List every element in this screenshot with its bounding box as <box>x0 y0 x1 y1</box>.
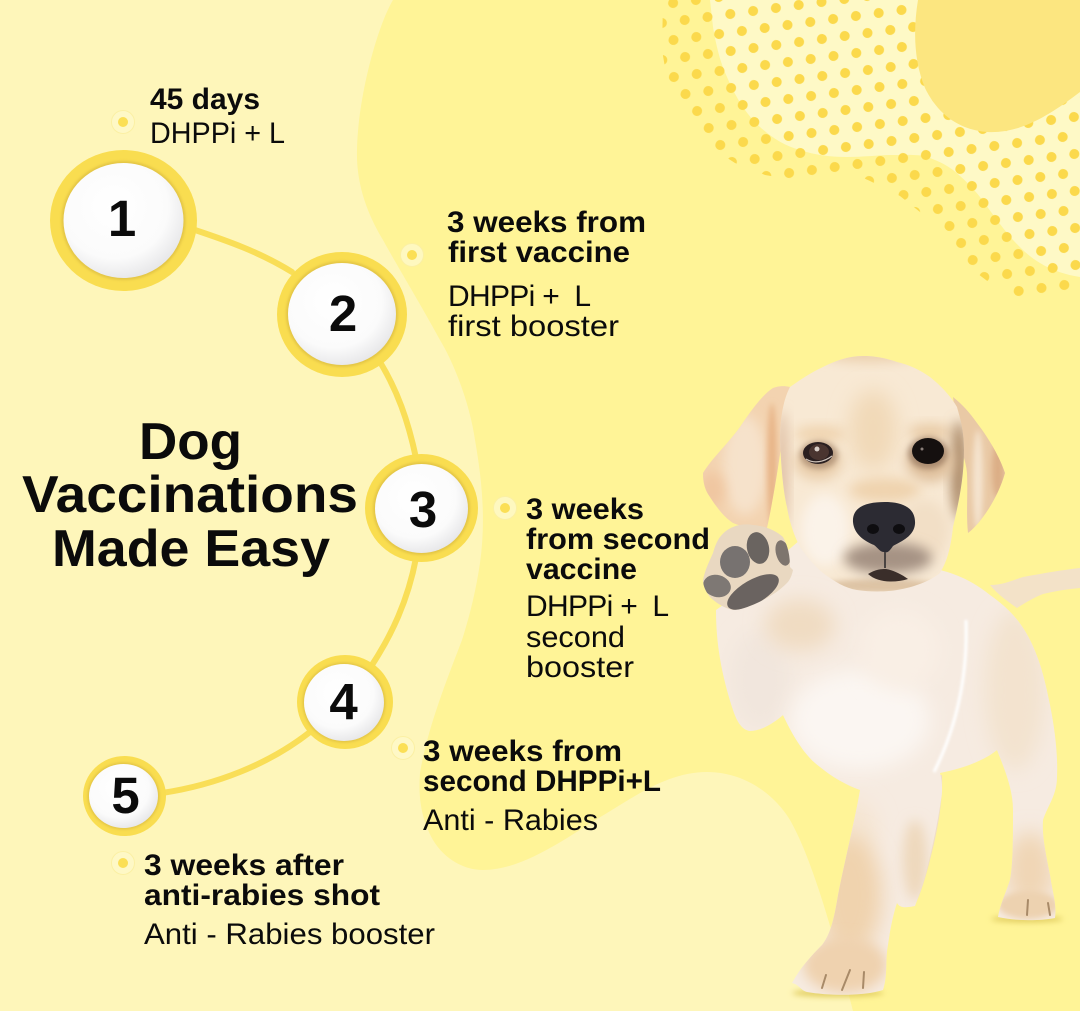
bullet step 1 <box>112 110 134 134</box>
right eye <box>908 437 948 469</box>
step 1 circle <box>50 150 197 291</box>
step 2 text <box>447 206 646 343</box>
step 4 circle <box>297 655 393 749</box>
step 2 text: 3 weeks from <box>447 206 646 239</box>
step 4 text: second DHPPi+L <box>423 765 661 798</box>
mouth <box>868 569 908 582</box>
title: Made Easy <box>52 520 330 578</box>
title <box>22 413 358 578</box>
raised paw <box>703 524 793 610</box>
step 3 text: vaccine <box>526 553 637 586</box>
step 3 text <box>526 493 710 684</box>
step 4 text <box>423 735 661 837</box>
step 1 circle: 1 <box>108 190 136 247</box>
ground shadows <box>792 916 1063 997</box>
timeline connectors <box>162 230 416 793</box>
bullet step 5 <box>112 852 134 874</box>
step 5 text: 3 weeks after <box>144 849 344 882</box>
background: pale blob behind dots <box>710 0 1080 277</box>
title: Dog <box>139 413 242 471</box>
halftone dot pattern <box>655 0 1080 305</box>
step 3 text: second <box>526 621 625 654</box>
left eye <box>800 441 838 469</box>
puppy photo illustration <box>695 342 1080 1010</box>
bullet step 3 <box>494 496 516 520</box>
step 4 text: Anti - Rabies <box>423 804 598 837</box>
body <box>716 542 1058 995</box>
left ear <box>703 386 790 528</box>
step 2 text: first vaccine <box>448 236 630 269</box>
step 3 circle: 3 <box>409 481 437 538</box>
toe lines <box>822 900 1050 990</box>
tail <box>990 568 1080 608</box>
dark yellow corner circle <box>915 0 1080 132</box>
step 5 text: Anti - Rabies booster <box>144 918 435 951</box>
step 1 text <box>150 83 285 150</box>
step 1 text: DHPPi + L <box>150 117 285 150</box>
step 2 text: DHPPi + L <box>448 280 591 313</box>
step 3 text: from second <box>526 523 710 556</box>
head <box>780 356 964 592</box>
nose <box>853 502 915 568</box>
step 3 text: 3 weeks <box>526 493 644 526</box>
step 5 text: anti-rabies shot <box>144 879 380 912</box>
far hind leg <box>897 775 942 907</box>
step 1 text: 45 days <box>150 83 260 116</box>
step 3 text: DHPPi + L <box>526 590 669 623</box>
step 2 circle <box>277 252 407 377</box>
step 2 circle: 2 <box>329 285 357 342</box>
step 3 text: booster <box>526 651 634 684</box>
step 4 circle: 4 <box>329 673 358 730</box>
title: Vaccinations <box>22 466 358 524</box>
step 2 text: first booster <box>448 310 619 343</box>
background: pale left blob <box>0 0 853 1011</box>
step 4 text: 3 weeks from <box>423 735 622 768</box>
step 5 circle: 5 <box>111 767 140 824</box>
right ear <box>953 397 1005 533</box>
step 5 text <box>144 849 435 951</box>
step 5 circle <box>83 756 166 836</box>
bullet step 2 <box>400 244 424 266</box>
bullet step 4 <box>392 736 414 760</box>
step 3 circle <box>365 454 478 562</box>
